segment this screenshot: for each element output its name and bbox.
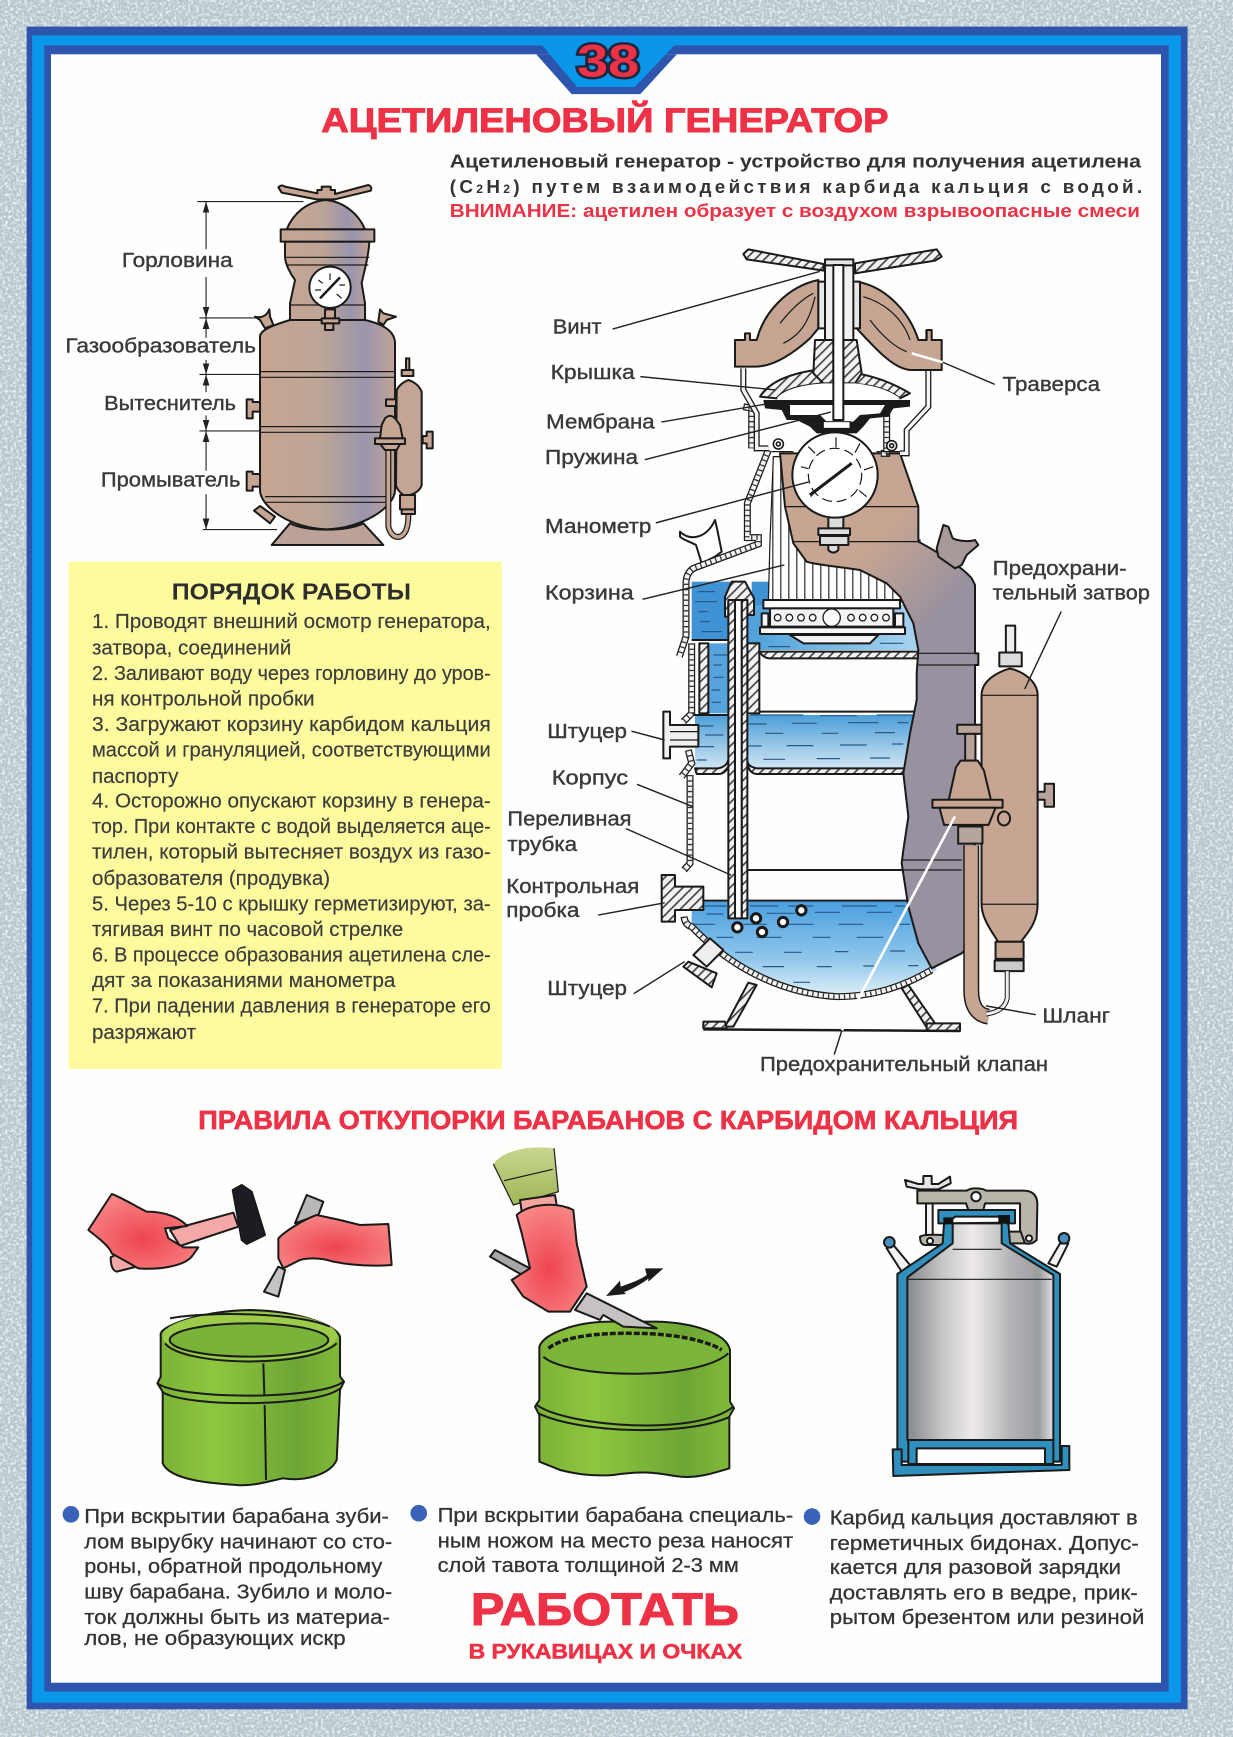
caption column 3: герметичных бидонах. Допус-	[830, 1533, 1139, 1555]
illustration: carbide container	[884, 1176, 1069, 1476]
main generator cutaway diagram	[662, 249, 1054, 1031]
procedure steps: паспорту	[92, 766, 178, 788]
safety slogan: В РУКАВИЦАХ И ОЧКАХ	[469, 1640, 742, 1663]
labels for main diagram: Штуцер	[547, 721, 627, 743]
procedure steps: образователя (продувка)	[92, 868, 330, 890]
labels for main diagram: Предохрани-	[993, 558, 1127, 580]
procedure steps: 3. Загружают корзину карбидом кальция	[92, 714, 491, 736]
labels for main diagram: Штуцер	[547, 978, 627, 1000]
stand	[703, 983, 960, 1031]
seal tank	[982, 626, 1054, 1014]
base	[272, 523, 383, 545]
arrow: cutting motion	[606, 1268, 663, 1296]
fittings	[662, 712, 723, 987]
safety valve	[932, 725, 1010, 844]
can body	[897, 1223, 1060, 1462]
caption column 1: лом вырубку начинают со сто-	[84, 1532, 392, 1554]
caption column 1	[63, 1506, 392, 1650]
glove holding knife	[512, 1205, 587, 1312]
gas bubbles	[733, 906, 806, 937]
knife	[490, 1250, 657, 1328]
panel: work procedure	[69, 562, 502, 1069]
intro text: (C 2H 2) путем взаимодействия карбида кальция с водой.	[450, 176, 1142, 197]
illustration: hammer and chisel over drum	[88, 1185, 392, 1485]
caption column 3: Карбид кальция доставляют в	[830, 1507, 1138, 1529]
upper dry chamber	[759, 659, 919, 711]
caption column 1: шву барабана. Зубило и моло-	[84, 1582, 392, 1604]
lid	[938, 1210, 1015, 1224]
caption column 1: ток должны быть из материа-	[84, 1607, 390, 1629]
glove holding chisel	[278, 1215, 392, 1268]
side clamp arms	[743, 330, 928, 453]
procedure steps: 4. Осторожно опускают корзину в генера-	[92, 791, 491, 813]
glove holding hammer	[88, 1194, 198, 1269]
ears	[255, 309, 396, 328]
green drum	[157, 1310, 344, 1485]
separator plates	[692, 640, 923, 901]
caption column 2: слой тавота толщиной 2-3 мм	[438, 1555, 739, 1577]
neck	[285, 242, 369, 320]
caption column 1: При вскрытии барабана зуби-	[84, 1506, 389, 1528]
caption column 3: доставлять его в ведре, прик-	[830, 1583, 1138, 1605]
intro text: Ацетиленовый генератор - устройство для получения ацетилена	[450, 150, 1142, 171]
labels for main diagram: Винт	[553, 316, 602, 338]
labels for main diagram: Пружина	[545, 447, 639, 469]
labels for main diagram: Предохранительный клапан	[760, 1054, 1048, 1076]
safety slogan: РАБОТАТЬ	[471, 1584, 739, 1635]
labels for main diagram: Траверса	[1003, 374, 1101, 396]
base frame	[893, 1440, 1069, 1476]
safety seal	[375, 358, 433, 537]
title: АЦЕТИЛЕНОВЫЙ ГЕНЕРАТОР	[321, 100, 888, 140]
dome and collar	[287, 200, 365, 229]
procedure steps: 7. При падении давления в генераторе его	[92, 996, 491, 1018]
clamp	[905, 1176, 1037, 1245]
traverse	[735, 280, 942, 370]
caption column 3	[804, 1507, 1144, 1629]
labels for small generator: Вытеснитель	[104, 393, 236, 415]
labels for main diagram: тельный затвор	[993, 582, 1150, 604]
side fittings	[247, 399, 275, 523]
pivot pins	[773, 439, 897, 451]
leader lines for main diagram	[598, 271, 1061, 1055]
labels for main diagram	[506, 316, 1150, 1076]
caption column 2: ным ножом на место реза наносят	[438, 1531, 793, 1553]
hose	[971, 845, 989, 1017]
lid	[760, 340, 910, 398]
labels for main diagram: Шланг	[1042, 1005, 1110, 1027]
procedure steps: затвора, соединений	[92, 638, 291, 660]
labels for small generator: Промыватель	[101, 469, 240, 491]
side handles	[884, 1233, 1069, 1272]
caption column 2: При вскрытии барабана специаль-	[438, 1505, 793, 1527]
labels for main diagram: Манометр	[545, 516, 651, 538]
membrane	[763, 400, 910, 433]
screw	[743, 249, 942, 420]
inner collars	[699, 643, 759, 713]
page number: 38	[577, 35, 639, 86]
labels for main diagram: Мембрана	[546, 412, 656, 434]
water: all chambers	[692, 582, 937, 997]
chisel	[264, 1195, 323, 1297]
procedure steps: дят за показаниями манометра	[92, 970, 396, 992]
procedure steps: 5. Через 5-10 с крышку герметизируют, за-	[92, 894, 491, 916]
basket frame	[760, 600, 905, 643]
procedure steps: 2. Заливают воду через горловину до уров-	[92, 663, 491, 685]
dimension lines for small generator	[197, 202, 304, 530]
procedure steps: тор. При контакте с водой выделяется аце-	[92, 816, 491, 838]
illustration: knife cutting drum	[490, 1147, 734, 1477]
labels for main diagram: Переливная	[507, 808, 631, 830]
vessel body	[260, 320, 395, 529]
procedure steps: массой и грануляцией, соответствующими	[92, 740, 491, 762]
chamber below membrane	[772, 451, 900, 453]
drum	[535, 1322, 734, 1477]
section heading: drum opening rules: ПРАВИЛА ОТКУПОРКИ БАРАБАНОВ С КАРБИДОМ КАЛЬЦИЯ	[198, 1107, 1018, 1135]
labels for small generator: Горловина	[122, 250, 234, 272]
caption column 1: роны, обратной продольному	[84, 1556, 382, 1578]
labels for small generator	[65, 250, 256, 491]
small generator external view	[247, 185, 433, 545]
sleeve	[493, 1147, 558, 1212]
labels for main diagram: пробка	[506, 900, 580, 922]
right brown ear	[937, 525, 978, 568]
caption column 1: лов, не образующих искр	[84, 1628, 346, 1650]
overflow tube	[725, 582, 754, 918]
caption column 3: кается для разовой зарядки	[830, 1557, 1121, 1579]
labels for small generator: Газообразователь	[65, 335, 256, 357]
left filler ear	[680, 520, 722, 563]
labels for main diagram: Крышка	[551, 362, 636, 384]
labels for main diagram: Контрольная	[506, 876, 639, 898]
procedure steps: тилен, который вытесняет воздух из газо-	[92, 842, 491, 864]
procedure steps: ня контрольной пробки	[92, 689, 315, 711]
caption column 3: рытом брезентом или резиной	[830, 1607, 1144, 1629]
procedure steps	[92, 611, 491, 1044]
panel heading: ПОРЯДОК РАБОТЫ	[172, 578, 411, 604]
safety slogan	[469, 1584, 742, 1663]
labels for main diagram: трубка	[507, 834, 578, 856]
safety seal tank, valve and hose	[932, 626, 1054, 1017]
intro text: ВНИМАНИЕ: ацетилен образует с воздухом взрывоопасные смеси	[450, 200, 1140, 221]
procedure steps: 6. В процессе образования ацетилена сле-	[92, 945, 491, 967]
handle	[278, 185, 371, 199]
procedure steps: тягивая винт по часовой стрелке	[92, 919, 403, 941]
procedure steps: 1. Проводят внешний осмотр генератора,	[92, 611, 491, 633]
labels for main diagram: Корзина	[545, 582, 635, 604]
gauge	[309, 267, 351, 330]
hammer	[111, 1185, 265, 1272]
caption column 2	[410, 1505, 793, 1577]
lower dry chamber	[693, 774, 923, 901]
labels for main diagram: Корпус	[552, 767, 628, 789]
brown body shell	[780, 453, 978, 968]
procedure steps: разряжают	[92, 1022, 196, 1044]
intro text	[450, 150, 1142, 221]
manometer	[792, 432, 878, 552]
basket ribbed area	[768, 457, 920, 602]
outer wall	[679, 407, 932, 997]
